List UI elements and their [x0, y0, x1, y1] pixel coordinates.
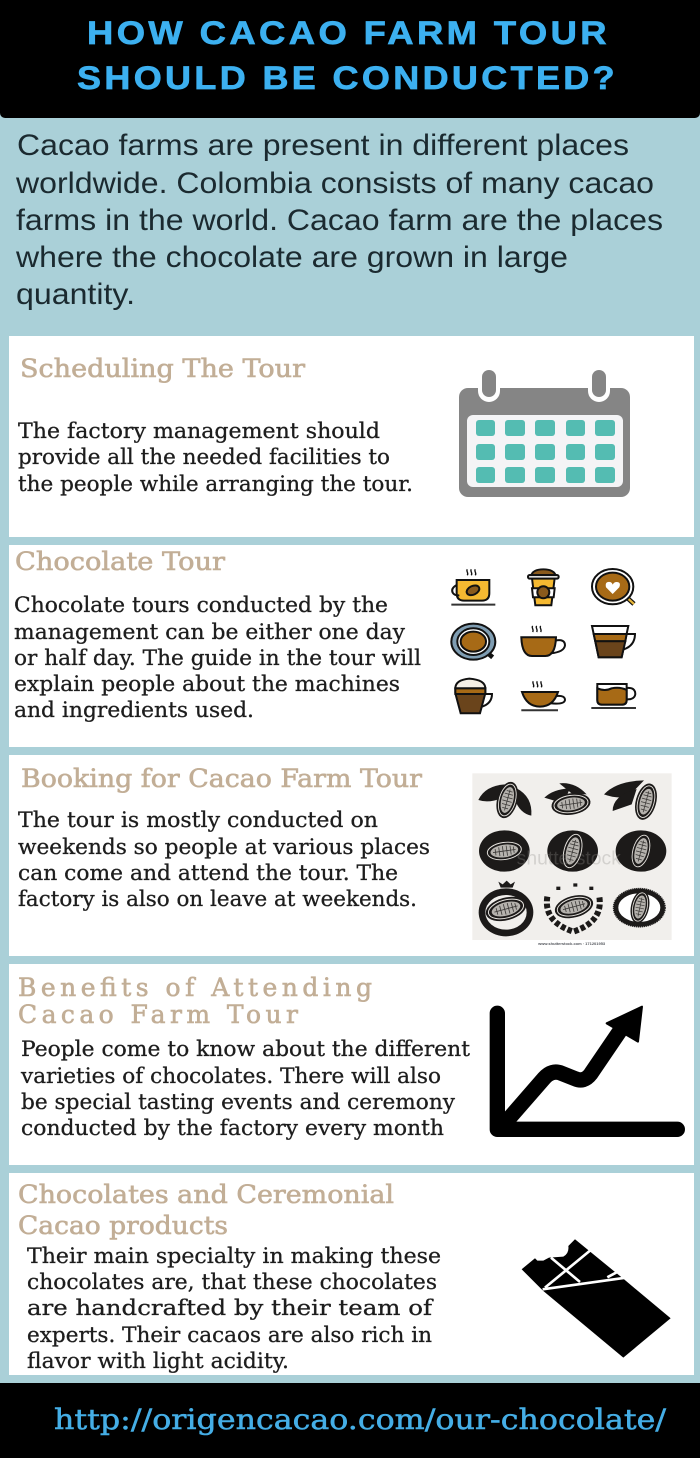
- text: booking: can come and attend the tour. The: [18, 861, 398, 885]
- cup 2: [528, 569, 559, 605]
- title: [77, 15, 618, 96]
- heading: ceremonial: Chocolates and Ceremonial: [18, 1180, 394, 1209]
- text: benefits: be special tasting events and ceremony: [21, 1090, 455, 1114]
- text: ceremonial: are handcrafted by their team of: [27, 1296, 435, 1320]
- text: chocolate tour: or half day. The guide in the tour will: [14, 646, 421, 670]
- icon: chocolate bar: [522, 1239, 671, 1358]
- footer url: http://origencacao.com/our-chocolate/: [54, 1403, 667, 1436]
- heading: chocolate tour: Chocolate Tour: [15, 547, 225, 576]
- text: chocolate tour: management can be either one day: [14, 620, 405, 644]
- panel: scheduling the tour: [9, 336, 694, 537]
- intro text block: farms in the world. Cacao farm are the places: [16, 204, 663, 237]
- cup 6: [592, 626, 635, 657]
- text: booking: [18, 808, 430, 911]
- icon: cacao pods: [472, 773, 672, 946]
- text: ceremonial: chocolates are, that these chocolates: [27, 1270, 437, 1294]
- icon: calendar: [459, 366, 630, 497]
- text: scheduling: the people while arranging the tour.: [18, 472, 413, 496]
- cup 7: [455, 679, 492, 713]
- heading: scheduling: Scheduling The Tour: [20, 354, 305, 383]
- text: chocolate tour: and ingredients used.: [14, 698, 254, 722]
- pods: [493, 779, 522, 821]
- text: benefits: conducted by the factory every month: [21, 1116, 444, 1140]
- title: SHOULD BE CONDUCTED?: [77, 60, 618, 96]
- icon: growth chart: [497, 1007, 677, 1129]
- cup 5: [521, 626, 565, 656]
- title banner: [0, 0, 700, 118]
- text: scheduling: [18, 419, 413, 496]
- intro text block: Cacao farms are present in different places: [17, 129, 629, 162]
- text: chocolate tour: [14, 593, 421, 722]
- heading: ceremonial: [18, 1180, 394, 1240]
- panel: chocolate tour: [9, 545, 694, 747]
- text: ceremonial: Their main specialty in making these: [27, 1244, 441, 1268]
- watermark: shutterstock: [517, 848, 621, 869]
- cup 3: [592, 569, 634, 604]
- intro text block: quantity.: [16, 278, 135, 311]
- panel: benefits: [9, 964, 694, 1165]
- heading: benefits: Cacao Farm Tour: [18, 1000, 298, 1029]
- cup 1: [451, 569, 495, 605]
- intro text block: where the chocolate are grown in large: [15, 241, 568, 274]
- intro text block: [15, 129, 663, 311]
- leaves: [478, 780, 644, 816]
- panel: booking: [9, 755, 694, 956]
- text: scheduling: The factory management should: [18, 419, 380, 443]
- text: ceremonial: flavor with light acidity.: [27, 1349, 289, 1373]
- cup 4: [451, 624, 495, 660]
- text: scheduling: provide all the needed facilities to: [18, 445, 390, 469]
- footer banner: [0, 1383, 700, 1458]
- text: booking: weekends so people at various places: [18, 835, 430, 859]
- heading: benefits: [18, 973, 372, 1029]
- text: benefits: People come to know about the different: [21, 1037, 471, 1061]
- cup 9: [591, 684, 636, 708]
- text: ceremonial: experts. Their cacaos are also rich in: [27, 1323, 432, 1347]
- intro text block: worldwide. Colombia consists of many cacao: [15, 167, 654, 200]
- text: benefits: varieties of chocolates. There will also: [20, 1064, 441, 1088]
- heading: benefits: Benefits of Attending: [18, 973, 372, 1002]
- crown: [498, 881, 515, 888]
- cup 8: [521, 681, 565, 710]
- icon: coffee cups: [451, 569, 636, 713]
- text: chocolate tour: explain people about the machines: [14, 672, 400, 696]
- title: HOW CACAO FARM TOUR: [87, 15, 610, 51]
- text: benefits: [20, 1037, 471, 1140]
- text: booking: The tour is mostly conducted on: [18, 808, 378, 832]
- heading: booking: Booking for Cacao Farm Tour: [21, 764, 422, 793]
- panel: ceremonial products: [9, 1173, 694, 1375]
- text: ceremonial: [27, 1244, 441, 1373]
- heading: ceremonial: Cacao products: [18, 1211, 228, 1240]
- text: chocolate tour: Chocolate tours conducted by the: [14, 593, 388, 617]
- stock caption: www.shutterstock.com · 171201953: [537, 941, 606, 946]
- text: booking: factory is also on leave at weekends.: [18, 887, 417, 911]
